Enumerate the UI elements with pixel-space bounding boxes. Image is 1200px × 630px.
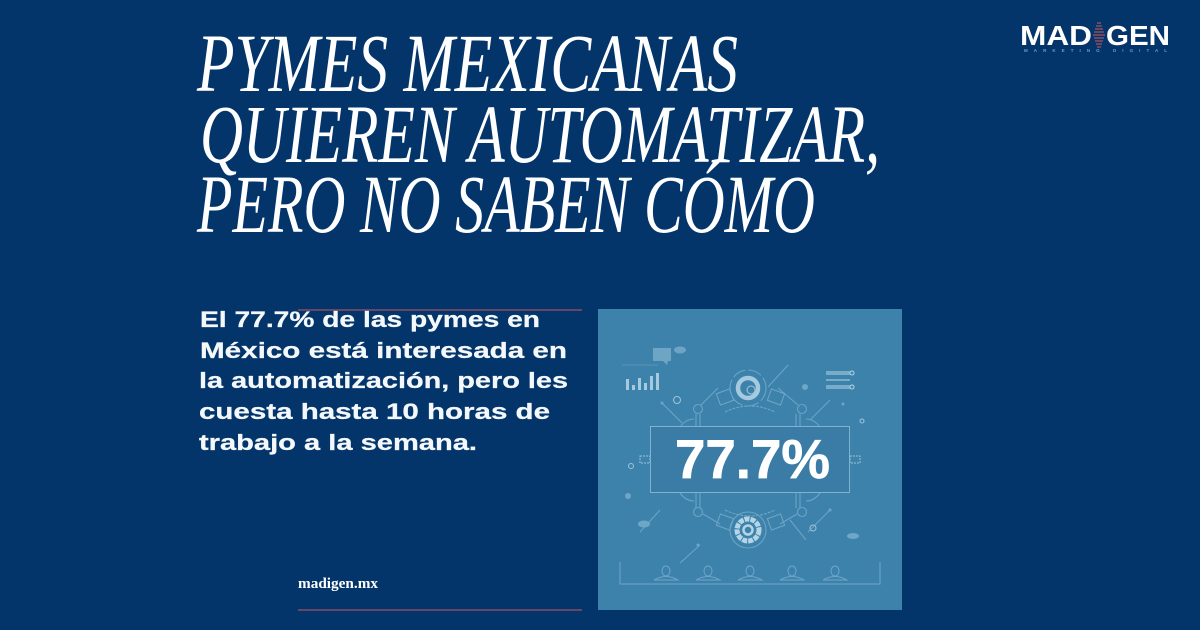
body text: México está interesada en	[200, 338, 567, 363]
title: PERO NO SABEN CÓMO	[196, 158, 815, 250]
body text: cuesta hasta 10 horas de	[199, 399, 550, 424]
diagram: people row	[620, 562, 880, 584]
title	[196, 17, 880, 250]
bottom divider	[298, 609, 582, 611]
logo: Madigen	[1020, 20, 1170, 53]
icon: bottom gear	[737, 519, 759, 541]
icon: bar chart	[622, 365, 659, 390]
top divider	[298, 309, 582, 311]
icon: sliders	[826, 371, 854, 389]
icon: scattered dots and clouds	[625, 384, 859, 546]
icon: top gear	[738, 378, 758, 398]
logo: Madigen: MARKETING DIGITAL	[1024, 48, 1167, 53]
body text: trabajo a la semana.	[199, 430, 477, 455]
website label: madigen.mx	[298, 576, 379, 592]
icon: dna strand	[1093, 23, 1105, 47]
diagram: gear ring	[640, 365, 830, 563]
body text: la automatización, pero les	[199, 368, 568, 393]
icon: chat bubble and cloud	[653, 346, 686, 365]
stat callout: 77.7%	[675, 428, 830, 490]
logo: Madigen: GEN	[1106, 20, 1170, 51]
panel: automation illustration	[598, 309, 902, 610]
title: PYMES MEXICANAS	[196, 17, 738, 109]
title: QUIEREN AUTOMATIZAR,	[200, 88, 880, 180]
body text: El 77.7% de las pymes en	[200, 307, 540, 332]
body text	[199, 307, 568, 455]
logo: Madigen: MAD	[1020, 20, 1092, 51]
